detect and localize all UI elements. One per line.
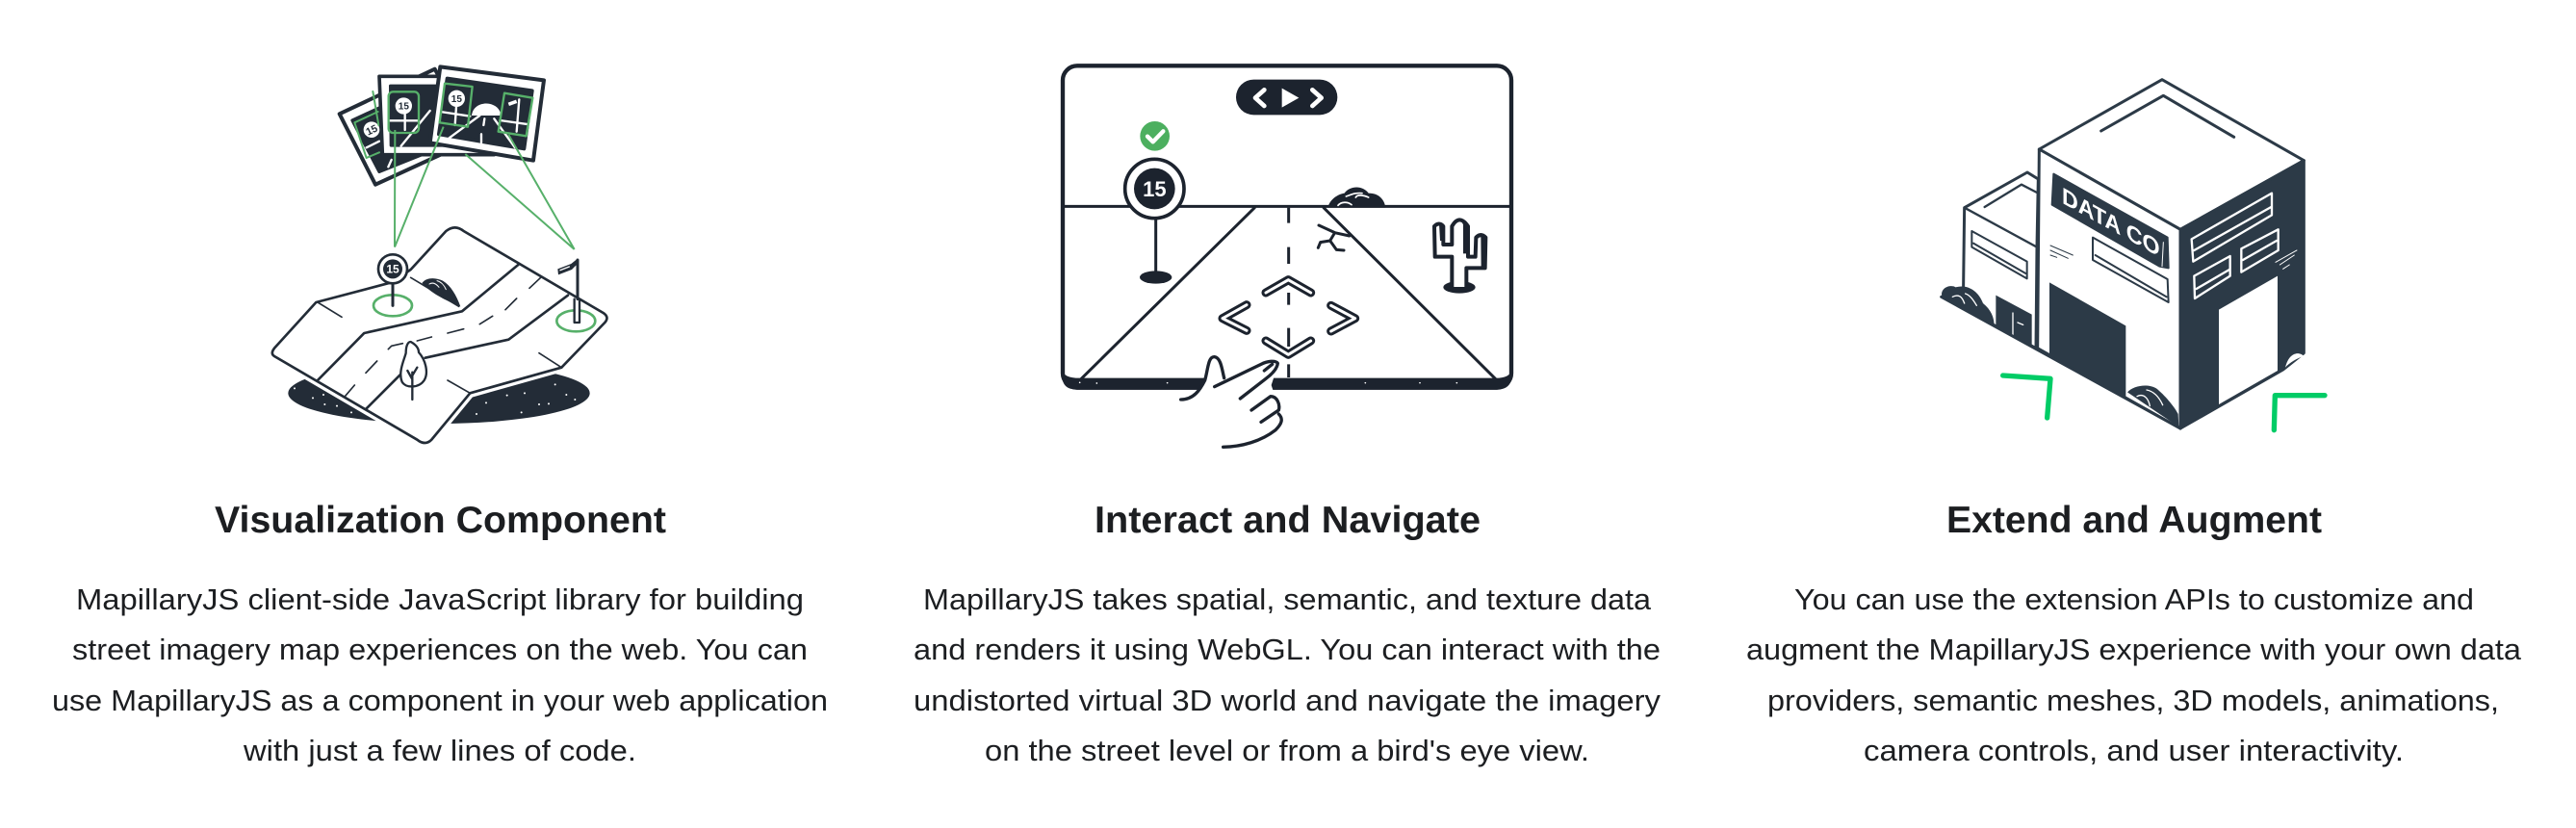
speed limit sign: 15 <box>1143 177 1167 201</box>
description <box>914 582 1662 767</box>
description: with just a few lines of code. <box>243 734 636 767</box>
road centre dashes <box>1284 208 1293 377</box>
main building <box>2038 80 2304 428</box>
tree <box>400 342 426 400</box>
building corner bushes <box>2285 353 2304 368</box>
description: You can use the extension APIs to customize and <box>1794 582 2474 616</box>
middle card <box>379 76 494 155</box>
description: undistorted virtual 3D world and navigate the imagery <box>914 684 1662 717</box>
heading: Interact and Navigate <box>1095 500 1481 541</box>
illustration: data company buildings <box>1942 80 2325 430</box>
green corner bracket right <box>2274 396 2325 430</box>
small building <box>1942 172 2038 349</box>
description: MapillaryJS client-side JavaScript library for building <box>76 582 804 616</box>
description: and renders it using WebGL. You can interact with the <box>914 633 1661 666</box>
illustration: map with cards <box>272 66 606 443</box>
map surface <box>272 227 606 443</box>
playback pill <box>1236 80 1337 115</box>
description: augment the MapillaryJS experience with your own data <box>1746 633 2522 666</box>
horizon bush <box>1327 188 1385 208</box>
horizon and road <box>1065 206 1509 378</box>
front card <box>430 66 544 161</box>
speed sign on map: 15 <box>386 263 399 276</box>
map shadow ellipse <box>288 363 590 424</box>
middle card: 15 <box>399 102 409 113</box>
speed sign on map <box>374 254 412 316</box>
heading: Visualization Component <box>215 500 666 541</box>
panel: Visualization Component <box>52 66 828 767</box>
front card: 15 <box>451 94 462 105</box>
green corner bracket left <box>2003 375 2050 418</box>
illustration: street view screen <box>1062 65 1512 447</box>
pointing hand <box>1181 356 1282 447</box>
description: camera controls, and user interactivity. <box>1864 734 2404 767</box>
panel: Extend and Augment <box>1746 80 2522 767</box>
back card: 15 <box>365 123 379 139</box>
description <box>1746 582 2522 767</box>
road crack <box>1318 225 1350 250</box>
side windows <box>2192 194 2297 298</box>
description: providers, semantic meshes, 3D models, animations, <box>1767 684 2499 717</box>
stack of street image cards <box>340 66 544 185</box>
description <box>52 582 828 767</box>
screen frame <box>1062 65 1512 390</box>
garage door <box>2049 282 2125 398</box>
panel: Interact and Navigate <box>914 65 1662 767</box>
front window <box>2093 238 2169 302</box>
description: MapillaryJS takes spatial, semantic, and texture data <box>923 582 1652 616</box>
heading: Extend and Augment <box>1946 500 2322 541</box>
cactus <box>1434 220 1485 294</box>
description: on the street level or from a bird's eye view. <box>985 734 1589 767</box>
speed limit sign <box>1125 159 1184 284</box>
description: street imagery map experiences on the web. You can <box>72 633 808 666</box>
sign band with company name: DATA CO <box>2062 183 2160 263</box>
description: use MapillaryJS as a component in your web application <box>52 684 828 717</box>
navigation arrows <box>1223 280 1355 354</box>
back card <box>340 69 474 185</box>
green projection lines <box>395 127 575 249</box>
flag post on map <box>556 259 595 331</box>
green check badge <box>1140 121 1170 151</box>
side door <box>2219 276 2278 404</box>
bush on map <box>422 278 460 306</box>
base line <box>1942 297 2180 428</box>
